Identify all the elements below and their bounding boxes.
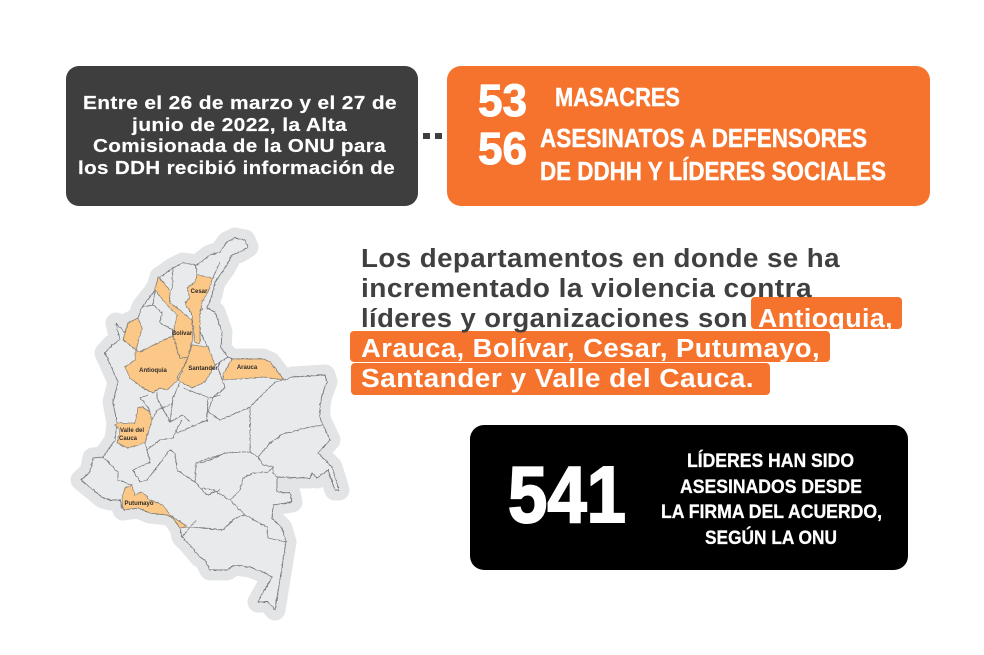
department labels: Valle del: [120, 428, 144, 434]
department labels: Santander: [188, 366, 218, 372]
panel: intro statement: los DDH recibió información de: [78, 158, 395, 178]
highlighted departments: [115, 275, 284, 528]
panel: massacres and killings: ASESINATOS A DEFENSORES: [540, 123, 867, 153]
internal department borders: [103, 262, 322, 542]
big number: 541: [508, 450, 626, 539]
highlight bars: [350, 297, 902, 395]
panel: massacres and killings: DE DDHH Y LÍDERES SOCIALES: [540, 156, 886, 186]
panel: intro statement: [66, 66, 418, 206]
department labels: Antioquia: [139, 368, 167, 374]
text block: departments with increased violence: Santander y Valle del Cauca.: [361, 365, 754, 393]
panel: massacres and killings: 56: [478, 123, 527, 174]
panel: massacres and killings: [447, 66, 930, 206]
caption: ASESINADOS DESDE: [680, 476, 862, 498]
department labels: Cesar: [191, 289, 208, 295]
caption: LA FIRMA DEL ACUERDO,: [661, 501, 882, 523]
text block: departments with increased violence: [350, 245, 902, 395]
caption: [661, 449, 882, 549]
department labels: Putumayo: [124, 501, 154, 507]
coastline and border line: [81, 238, 339, 610]
department labels: [119, 289, 258, 507]
connector dots: [423, 133, 442, 139]
panel: intro statement: Entre el 26 de marzo y el 27 de: [83, 93, 397, 113]
panel: intro statement: junio de 2022, la Alta: [131, 115, 348, 135]
text block: departments with increased violence: Los departamentos en donde se ha: [361, 245, 840, 273]
map of Colombia: [81, 238, 339, 610]
text block: departments with increased violence: líderes y organizaciones son: [361, 305, 748, 333]
map silhouette: [81, 238, 339, 610]
caption: LÍDERES HAN SIDO: [687, 449, 854, 472]
text block: departments with increased violence: incrementado la violencia contra: [361, 275, 812, 303]
caption: SEGÚN LA ONU: [705, 525, 837, 549]
text block: departments with increased violence: Arauca, Bolívar, Cesar, Putumayo,: [361, 335, 820, 363]
panel: 541 leaders killed: [470, 425, 908, 570]
panel: massacres and killings: MASACRES: [555, 82, 680, 112]
panel: massacres and killings: 53: [478, 75, 527, 126]
panel: intro statement: Comisionada de la ONU para: [93, 136, 387, 156]
department labels: Cauca: [119, 436, 138, 442]
department labels: Bolívar: [172, 331, 193, 337]
department labels: Arauca: [237, 365, 258, 371]
text block: departments with increased violence: Antioquia,: [758, 305, 893, 333]
